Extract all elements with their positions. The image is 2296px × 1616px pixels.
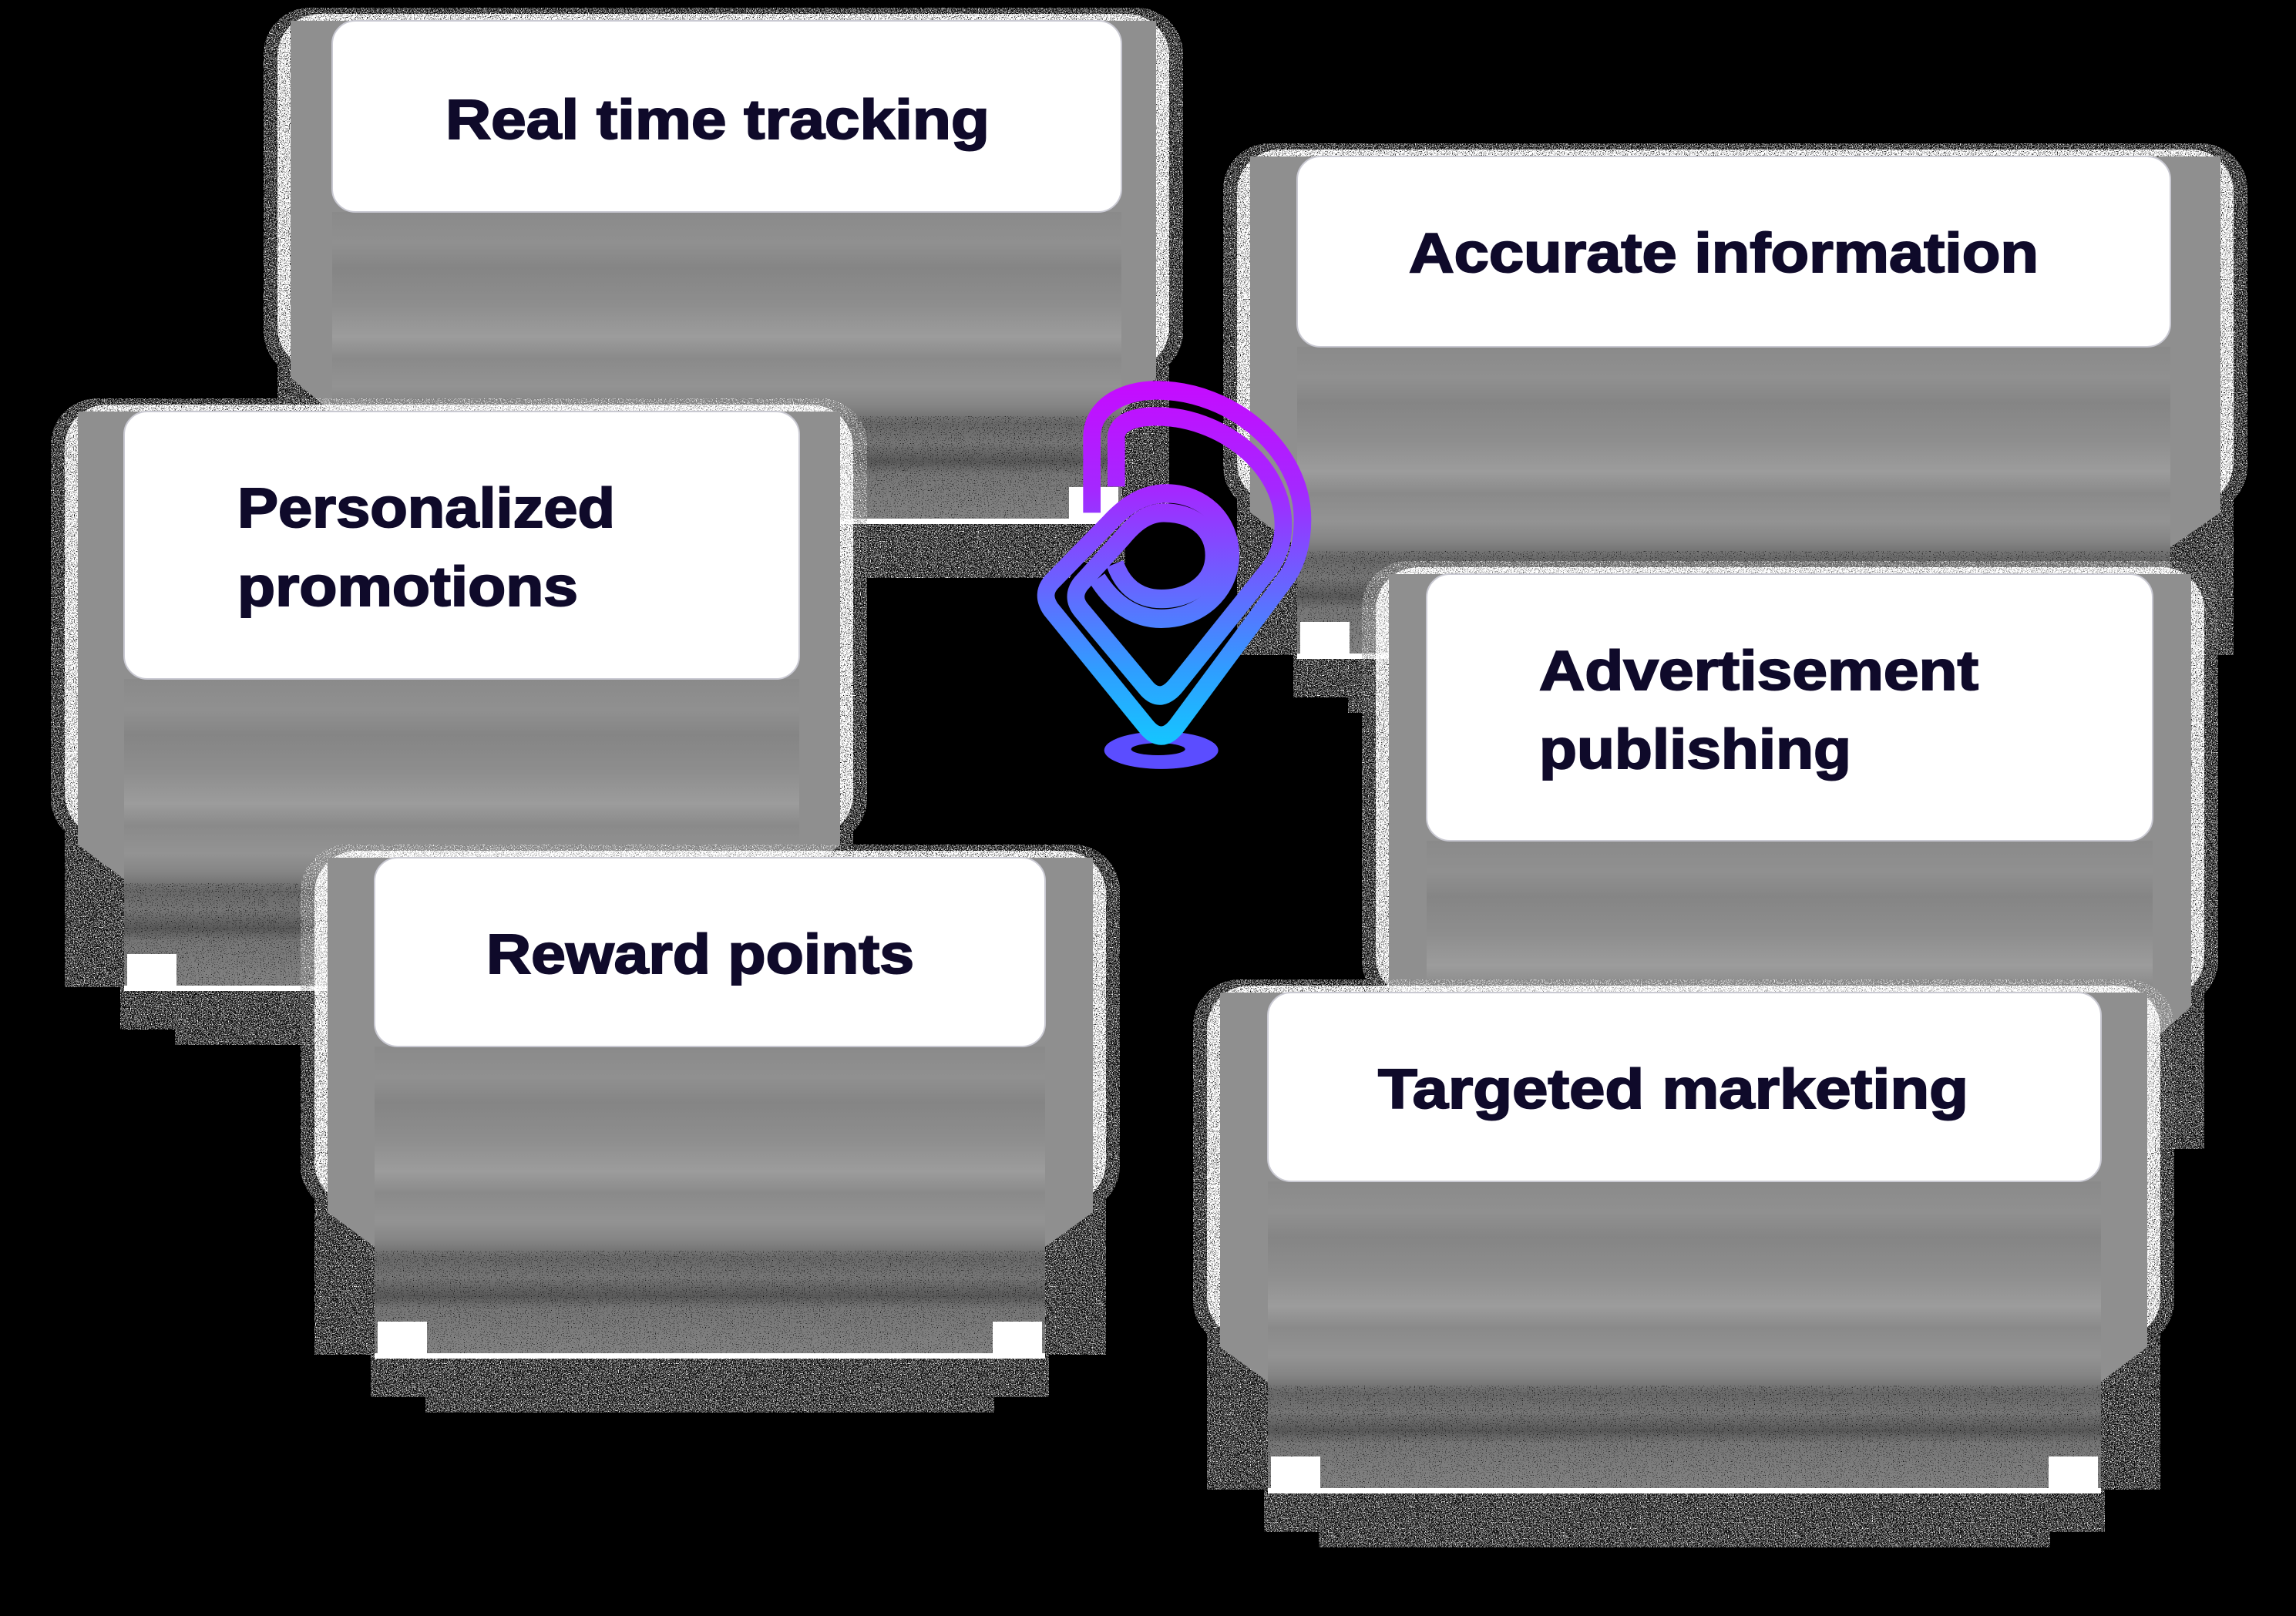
- panel: accurate information: [1223, 143, 2247, 713]
- icon: location pin: [1046, 390, 1303, 769]
- shadow: advertisement publishing: [1362, 561, 2218, 1207]
- panel: targeted marketing: [1193, 979, 2174, 1547]
- label: accurate information: Accurate information: [1409, 223, 2039, 284]
- panel: reward points: [301, 845, 1120, 1413]
- card: reward points: [375, 858, 1045, 1047]
- card: personalized promotions: [124, 412, 799, 679]
- shadow: real time tracking: [264, 8, 1183, 578]
- shadow: reward points: [301, 845, 1120, 1413]
- label: reward points: Reward points: [486, 924, 914, 986]
- panel: real time tracking: [264, 8, 1183, 578]
- card: accurate information: [1297, 156, 2170, 347]
- label: advertisement publishing: Advertisement: [1539, 640, 1978, 702]
- label: personalized promotions: promotions: [237, 556, 578, 618]
- shadow: personalized promotions: [51, 398, 867, 1045]
- shadow: accurate information: [1223, 143, 2247, 713]
- label: real time tracking: Real time tracking: [445, 89, 990, 151]
- card: real time tracking: [332, 21, 1121, 212]
- card: targeted marketing: [1268, 993, 2101, 1181]
- panel: personalized promotions: [51, 398, 867, 1045]
- card: advertisement publishing: [1427, 574, 2153, 841]
- label: advertisement publishing: publishing: [1539, 719, 1851, 781]
- label: personalized promotions: [237, 478, 615, 618]
- label: personalized promotions: Personalized: [237, 478, 615, 539]
- label: advertisement publishing: [1539, 640, 1978, 781]
- panel: advertisement publishing: [1362, 561, 2218, 1207]
- shadow: targeted marketing: [1193, 979, 2174, 1547]
- label: targeted marketing: Targeted marketing: [1378, 1059, 1968, 1120]
